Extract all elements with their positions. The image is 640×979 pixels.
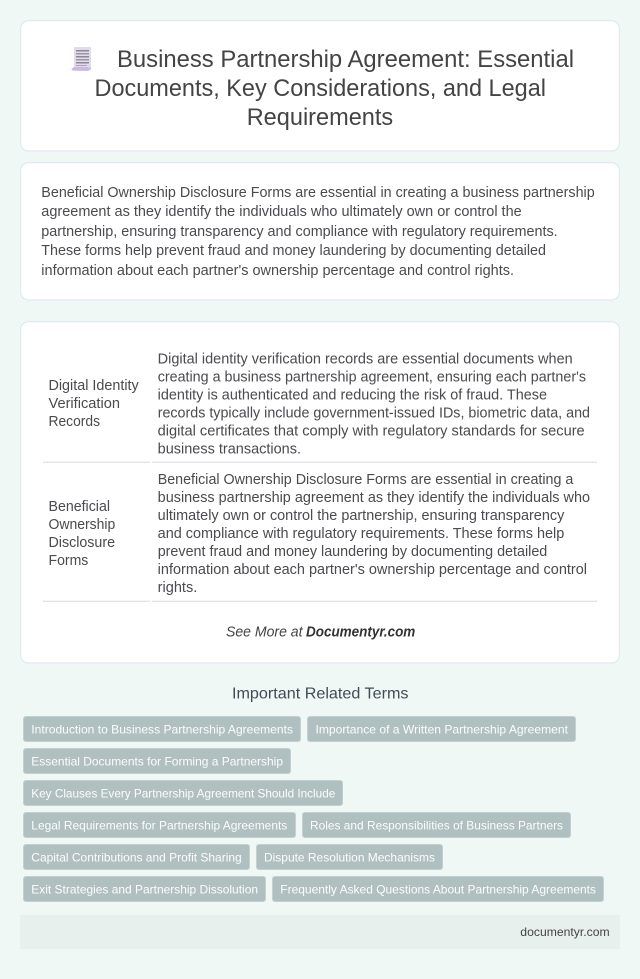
see more link: See More at xyxy=(226,625,303,641)
row label: Beneficial xyxy=(48,499,110,515)
footer bar xyxy=(20,915,620,949)
table row: beneficial ownership disclosure forms xyxy=(48,472,590,596)
row description: prevent fraud and money laundering by documenting detailed xyxy=(158,544,547,560)
tag: Essential Documents for Forming a Partnership xyxy=(31,754,283,768)
row description: Beneficial Ownership Disclosure Forms are essential in creating a xyxy=(158,472,573,488)
row description: records typically include government-issued IDs, biometric data, and xyxy=(158,405,590,421)
row label: Forms xyxy=(48,553,88,569)
row description: digital certificates that comply with regulatory standards for secure xyxy=(158,423,585,439)
intro text block: partnership, ensuring transparency and compliance with regulatory requirements. xyxy=(41,224,558,240)
tag: Importance of a Written Partnership Agreement xyxy=(316,722,569,736)
row label: Records xyxy=(48,414,100,430)
tag xyxy=(308,716,576,742)
row description: Digital identity verification records are essential documents when xyxy=(158,351,573,367)
row description xyxy=(158,472,590,596)
tag: Frequently Asked Questions About Partnership Agreements xyxy=(280,882,596,896)
row label: Ownership xyxy=(48,517,115,533)
row description: information about each partner's ownership percentage and control xyxy=(158,562,587,578)
title: Business Partnership Agreement: Essential xyxy=(117,46,574,73)
intro text block: information about each partner's ownership percentage and control rights. xyxy=(41,263,514,279)
tag: Introduction to Business Partnership Agreements xyxy=(31,722,293,736)
row description: rights. xyxy=(158,580,197,596)
panel: documents table xyxy=(21,322,619,663)
tag xyxy=(24,876,266,902)
title xyxy=(94,46,574,131)
tag xyxy=(24,748,290,774)
row description: creating a business partnership agreement, ensuring each partner's xyxy=(158,369,586,385)
row description: identity is authenticated and reducing the risk of fraud. These xyxy=(158,387,547,403)
icon: document scroll xyxy=(72,47,91,71)
intro text block: Beneficial Ownership Disclosure Forms are essential in creating a business partnership xyxy=(41,185,595,201)
tag: Roles and Responsibilities of Business Partners xyxy=(310,818,563,832)
tag: Exit Strategies and Partnership Dissolution xyxy=(31,882,258,896)
row label: Verification xyxy=(48,396,120,412)
row label xyxy=(48,499,115,569)
intro text block: These forms help prevent fraud and money laundering by documenting detailed xyxy=(41,243,546,259)
tag xyxy=(24,780,342,806)
panel: title card xyxy=(21,21,619,151)
row description: ultimately own or control the partnership, ensuring transparency xyxy=(158,508,565,524)
row label: Disclosure xyxy=(48,535,115,551)
tag xyxy=(256,844,442,870)
see more link xyxy=(226,625,415,641)
row label xyxy=(48,378,139,430)
tag xyxy=(302,812,570,838)
intro text block: agreement as they identify the individuals who ultimately own or control the xyxy=(41,204,522,220)
intro text block xyxy=(41,185,595,279)
tag: Key Clauses Every Partnership Agreement Should Include xyxy=(31,786,336,800)
title: Requirements xyxy=(247,104,393,131)
row label: Digital Identity xyxy=(48,378,139,394)
footer bar: documentyr.com xyxy=(520,925,610,939)
tag: Legal Requirements for Partnership Agreements xyxy=(31,818,287,832)
tag: Dispute Resolution Mechanisms xyxy=(264,850,435,864)
title: Documents, Key Considerations, and Legal xyxy=(94,75,546,102)
row description xyxy=(158,351,590,457)
tag xyxy=(272,876,604,902)
panel: intro summary xyxy=(21,163,619,300)
tag xyxy=(24,716,300,742)
table row: digital identity verification records xyxy=(48,351,590,457)
related terms tags xyxy=(24,716,604,902)
tag: Capital Contributions and Profit Sharing xyxy=(31,850,242,864)
row description: business partnership agreement as they identify the individuals who xyxy=(158,490,590,506)
heading: important related terms: Important Related Terms xyxy=(232,686,408,703)
row description: and compliance with regulatory requirements. These forms help xyxy=(158,526,564,542)
row description: business transactions. xyxy=(158,441,301,457)
tag xyxy=(24,812,296,838)
see more link: Documentyr.com xyxy=(306,625,415,641)
tag xyxy=(24,844,250,870)
